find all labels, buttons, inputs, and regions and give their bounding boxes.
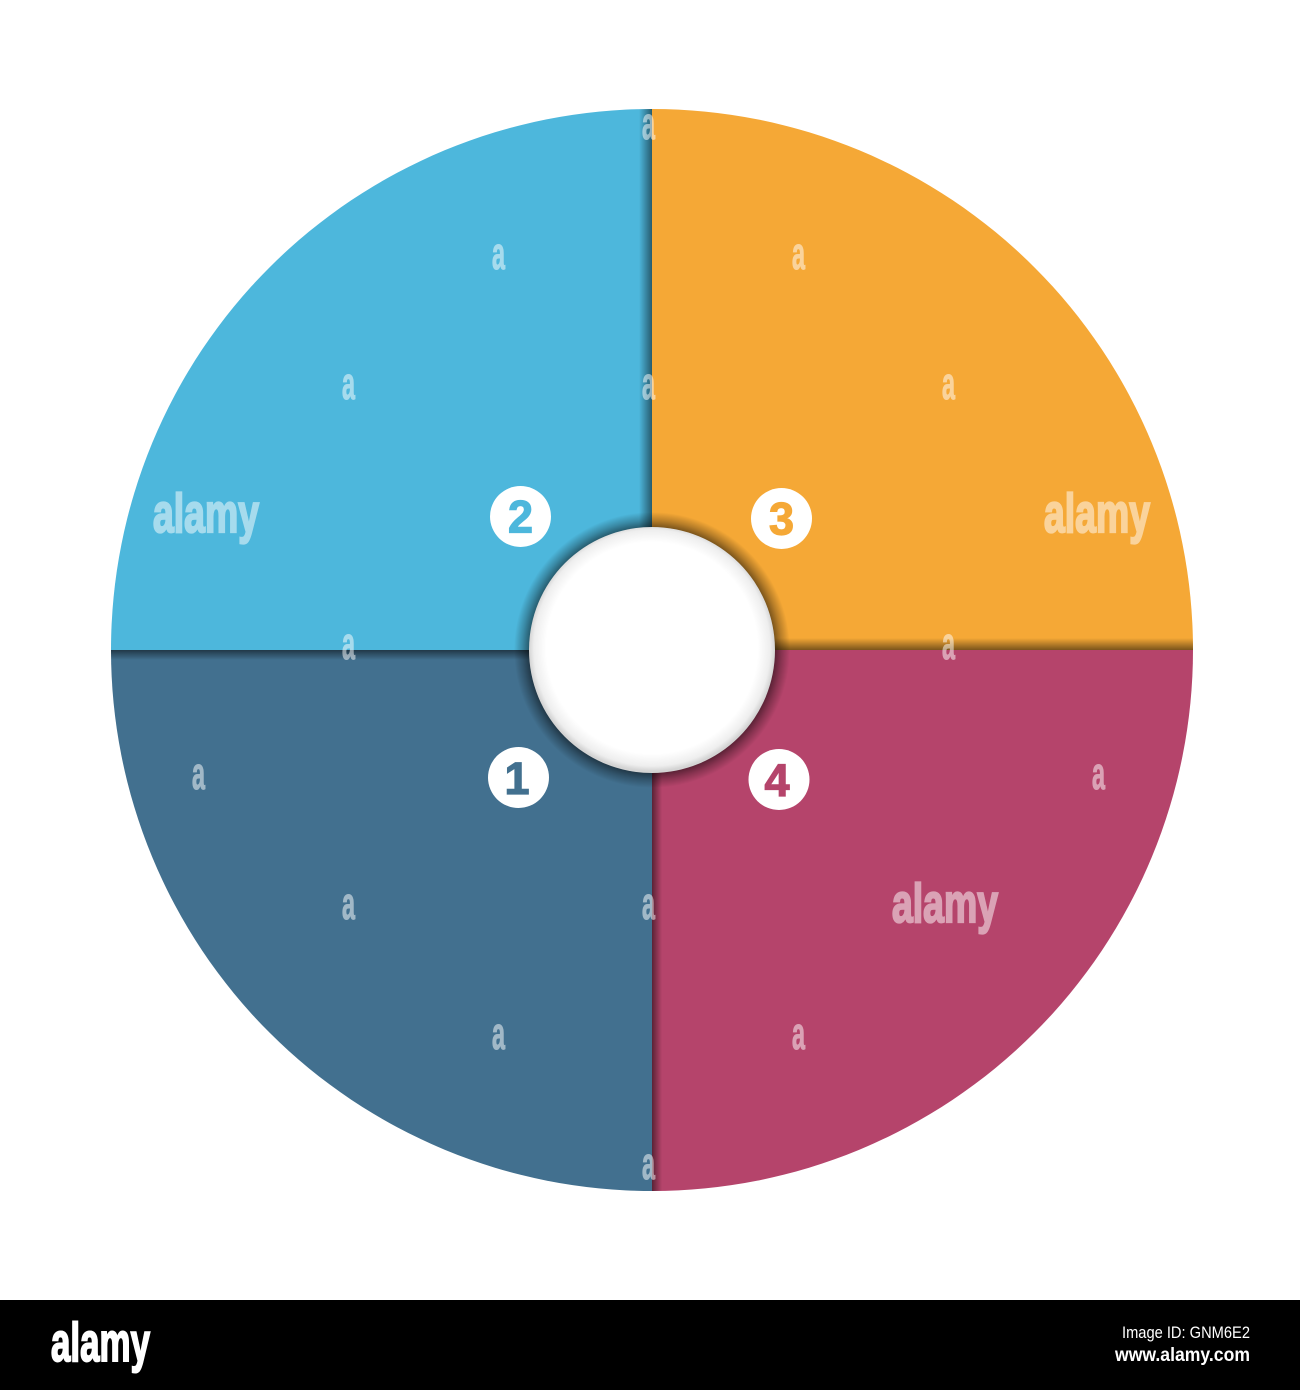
number badge 4 bbox=[748, 749, 810, 810]
panel: segment 2 blue bbox=[111, 109, 652, 650]
panel: segment 3 orange bbox=[652, 109, 1193, 650]
watermark: small repeated letters: a bbox=[642, 98, 656, 149]
watermark: small repeated letters: a bbox=[192, 748, 206, 799]
number badge 4: 4 bbox=[764, 755, 790, 806]
watermark: small repeated letters: a bbox=[492, 1008, 506, 1059]
number badge 1: 1 bbox=[504, 753, 530, 804]
segment seam shadows bbox=[111, 109, 1193, 1191]
hub drop shadow bbox=[514, 512, 790, 788]
hub white disc bbox=[529, 527, 775, 773]
watermark: small repeated letters: a bbox=[342, 618, 356, 669]
watermark: small repeated letters: a bbox=[642, 878, 656, 929]
watermark: small repeated letters: a bbox=[942, 358, 956, 409]
panel: segment 1 dark blue bbox=[111, 650, 652, 1191]
watermark: small repeated letters: a bbox=[1092, 748, 1106, 799]
number badge 1 bbox=[488, 747, 549, 808]
footer bar bbox=[0, 1300, 1300, 1390]
watermark: small repeated letters: a bbox=[942, 618, 956, 669]
footer logo: alamy bbox=[51, 1311, 150, 1373]
footer website: www.alamy.com bbox=[1114, 1345, 1250, 1366]
watermark: small repeated letters: a bbox=[342, 878, 356, 929]
watermark: small repeated letters: a bbox=[792, 228, 806, 279]
watermark: alamy crimson segment: alamy bbox=[892, 872, 998, 934]
number badge 3: 3 bbox=[769, 494, 794, 544]
number badge 3 bbox=[751, 488, 812, 549]
footer image id: Image ID: GNM6E2 bbox=[1122, 1323, 1250, 1342]
watermark: small repeated letters: a bbox=[642, 1138, 656, 1189]
watermark: alamy blue segment: alamy bbox=[153, 482, 259, 544]
watermark: small repeated letters: a bbox=[342, 358, 356, 409]
number badge 2: 2 bbox=[508, 492, 533, 542]
watermarks on the segments bbox=[153, 98, 1150, 1189]
panel: segment 4 crimson bbox=[652, 650, 1193, 1191]
centre hub bbox=[514, 512, 790, 788]
watermark: alamy orange segment: alamy bbox=[1044, 482, 1150, 544]
watermark: small repeated letters: a bbox=[492, 228, 506, 279]
watermark: small repeated letters: a bbox=[792, 1008, 806, 1059]
circle diagram bbox=[111, 109, 1193, 1191]
watermark: small repeated letters bbox=[192, 98, 1106, 1189]
watermark: small repeated letters: a bbox=[642, 358, 656, 409]
number badge 2 bbox=[490, 486, 551, 547]
